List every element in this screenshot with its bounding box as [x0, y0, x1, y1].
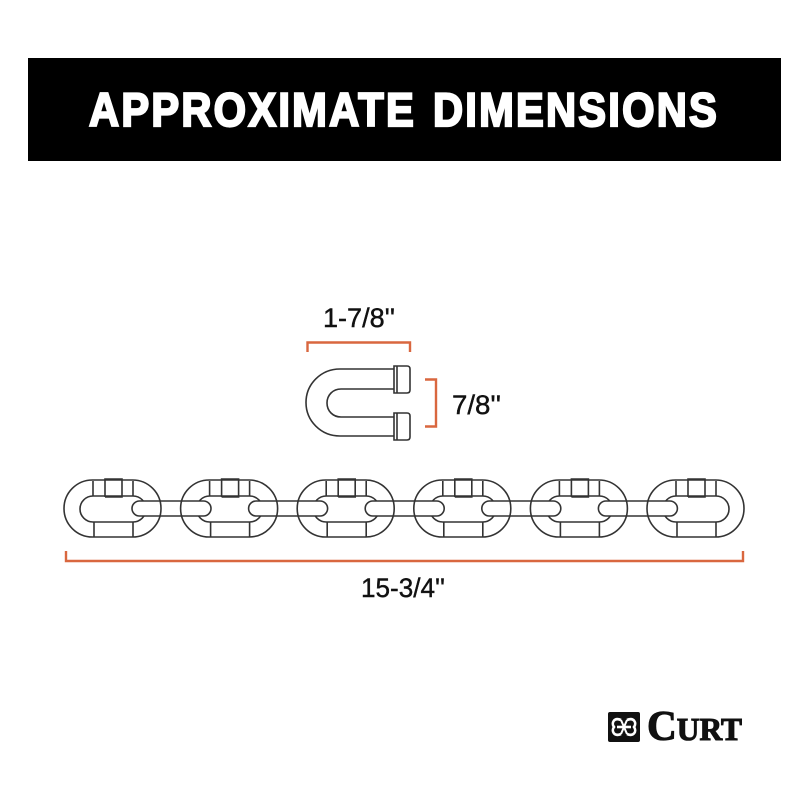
bracket: chain length [66, 551, 743, 561]
connecting rods [132, 501, 677, 516]
bracket: hook height [425, 380, 436, 426]
title: APPROXIMATE [89, 83, 416, 136]
icon: U-shaped pin [306, 366, 410, 440]
wordmark: CURT [647, 704, 742, 750]
link details [80, 479, 729, 537]
label: hook height: 7/8'' [452, 390, 501, 420]
link outlines [64, 480, 744, 537]
chain [64, 479, 744, 537]
title [89, 83, 719, 136]
label: chain length: 15-3/4'' [361, 573, 445, 603]
title: DIMENSIONS [433, 83, 719, 136]
logo: CURT [608, 704, 742, 750]
title banner [28, 58, 781, 161]
bracket: hook width [308, 342, 410, 352]
label: hook width: 1-7/8'' [323, 303, 395, 333]
icon: logo mark [608, 712, 640, 742]
